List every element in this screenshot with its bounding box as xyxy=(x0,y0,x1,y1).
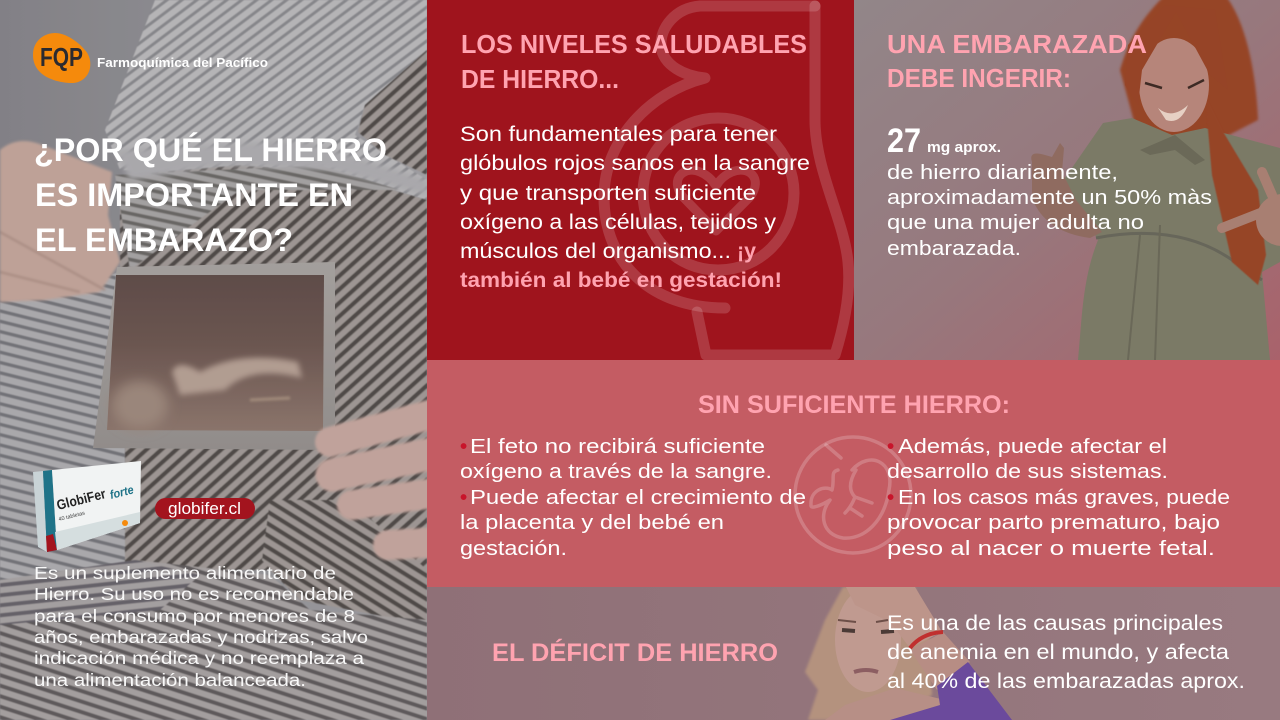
title: ES IMPORTANTE EN xyxy=(35,177,353,213)
text block: consequences right xyxy=(887,435,1230,560)
text block: niveles body: y que transporten suficiente xyxy=(460,181,756,205)
photo: left hand xyxy=(0,141,120,302)
heading: una embarazada xyxy=(887,31,1147,93)
heading: los niveles saludables: DE HIERRO... xyxy=(461,66,619,94)
heading: una embarazada: DEBE INGERIR: xyxy=(887,65,1071,93)
product box: GlobiFer forte xyxy=(33,461,141,552)
photo: left lower shirt xyxy=(0,270,135,590)
text block: consequences left: oxígeno a través de la sangre. xyxy=(460,460,772,483)
text block: ingesta: embarazada. xyxy=(887,237,1021,260)
text block: ingesta: aproximadamente un 50% màs xyxy=(887,186,1212,209)
link pill: globifer.cl: globifer.cl xyxy=(168,499,241,518)
text block: product disclaimer: años, embarazadas y nodrizas, salvo xyxy=(34,627,368,647)
text block: consequences left xyxy=(460,435,806,560)
text block: niveles body xyxy=(460,122,810,292)
text block: ingesta xyxy=(887,161,1212,260)
logo wordmark: Farmoquímica del Pacífico xyxy=(97,56,268,70)
text block: consequences right: provocar parto prematuro, bajo xyxy=(887,511,1220,534)
text block: déficit: al 40% de las embarazadas aprox. xyxy=(887,670,1245,693)
title xyxy=(34,132,387,258)
panel: left photo background xyxy=(0,0,440,720)
text block: consequences right: • xyxy=(887,435,894,458)
heading: los niveles saludables xyxy=(461,31,807,94)
text block: consequences left: gestación. xyxy=(460,537,567,560)
heading: sin suficiente hierro: SIN SUFICIENTE HIERRO: xyxy=(698,391,1010,419)
text block: consequences right: • xyxy=(887,486,894,509)
photo: dark striped shirt lower xyxy=(0,380,427,720)
title: EL EMBARAZO? xyxy=(35,222,293,258)
product box: GlobiFer forte: GlobiFer xyxy=(55,485,108,513)
text block: déficit: de anemia en el mundo, y afecta xyxy=(887,641,1229,664)
text block: consequences right: En los casos más graves, puede xyxy=(898,486,1230,509)
icon: pregnant silhouette with heart xyxy=(604,6,849,355)
logo: Farmoquímica del Pacífico xyxy=(33,33,268,83)
text block: niveles body: también al bebé en gestación! xyxy=(460,268,782,292)
text block: ingesta: que una mujer adulta no xyxy=(887,211,1144,234)
icon: fetus in circle xyxy=(795,437,911,553)
photo: woman with headache xyxy=(805,587,1012,720)
panel: una embarazada xyxy=(854,0,1280,360)
stat: 27 mg aprox: mg aprox. xyxy=(927,139,1001,156)
icon: FQP orange badge xyxy=(33,33,90,83)
text block: consequences left: • xyxy=(460,435,467,458)
text block: ingesta: de hierro diariamente, xyxy=(887,161,1118,184)
photo: right hand fingers xyxy=(330,412,440,545)
heading: el déficit de hierro: EL DÉFICIT DE HIERRO xyxy=(492,638,778,667)
photo: light striped shirt xyxy=(105,0,427,200)
text block: déficit: Es una de las causas principales xyxy=(887,612,1223,635)
product box: GlobiFer forte: forte xyxy=(108,482,135,502)
photo: dark striped shirt upper xyxy=(115,50,427,440)
text block: déficit xyxy=(887,612,1245,693)
text block: product disclaimer: Es un suplemento alimentario de xyxy=(34,563,336,583)
text block: product disclaimer: para el consumo por menores de 8 xyxy=(34,606,355,626)
link pill: globifer.cl xyxy=(155,498,255,519)
text block: niveles body: Son fundamentales para tener xyxy=(460,122,777,146)
text block: niveles body: oxígeno a las células, tejidos y xyxy=(460,210,776,234)
photo: ultrasound print xyxy=(93,262,335,450)
text block: product disclaimer: indicación médica y no reemplaza a xyxy=(34,648,364,668)
text block: product disclaimer: Hierro. Su uso no es recomendable xyxy=(34,584,354,604)
photo: light shirt fold xyxy=(115,140,427,195)
heading: los niveles saludables: LOS NIVELES SALUDABLES xyxy=(461,31,807,59)
text block: consequences left: la placenta y del bebé en xyxy=(460,511,724,534)
text block: consequences right: peso al nacer o muerte fetal. xyxy=(887,537,1215,560)
product box: GlobiFer forte: 40 tabletas xyxy=(58,511,86,523)
text block: niveles body: ¡y xyxy=(737,239,756,263)
text block: consequences right: Además, puede afectar el xyxy=(898,435,1167,458)
panel: sin suficiente hierro xyxy=(427,360,1280,587)
icon: FQP orange badge: FQP xyxy=(40,42,83,72)
text block: product disclaimer xyxy=(34,563,368,690)
text block: consequences left: Puede afectar el crecimiento de xyxy=(470,486,806,509)
photo: pregnant woman xyxy=(1031,0,1280,360)
title: ¿POR QUÉ EL HIERRO xyxy=(34,132,387,168)
panel: déficit de hierro xyxy=(427,587,1280,720)
text block: product disclaimer: una alimentación balanceada. xyxy=(34,670,306,690)
text block: niveles body: glóbulos rojos sanos en la sangre xyxy=(460,151,810,175)
heading: una embarazada: UNA EMBARAZADA xyxy=(887,31,1147,59)
stat: 27 mg aprox xyxy=(887,122,1001,160)
text block: consequences left: • xyxy=(460,486,467,509)
text block: consequences right: desarrollo de sus sistemas. xyxy=(887,460,1168,483)
panel: niveles saludables xyxy=(427,0,854,360)
stat: 27 mg aprox: 27 xyxy=(887,122,921,160)
text block: niveles body: músculos del organismo... xyxy=(460,239,731,263)
text block: consequences left: El feto no recibirá suficiente xyxy=(470,435,765,458)
